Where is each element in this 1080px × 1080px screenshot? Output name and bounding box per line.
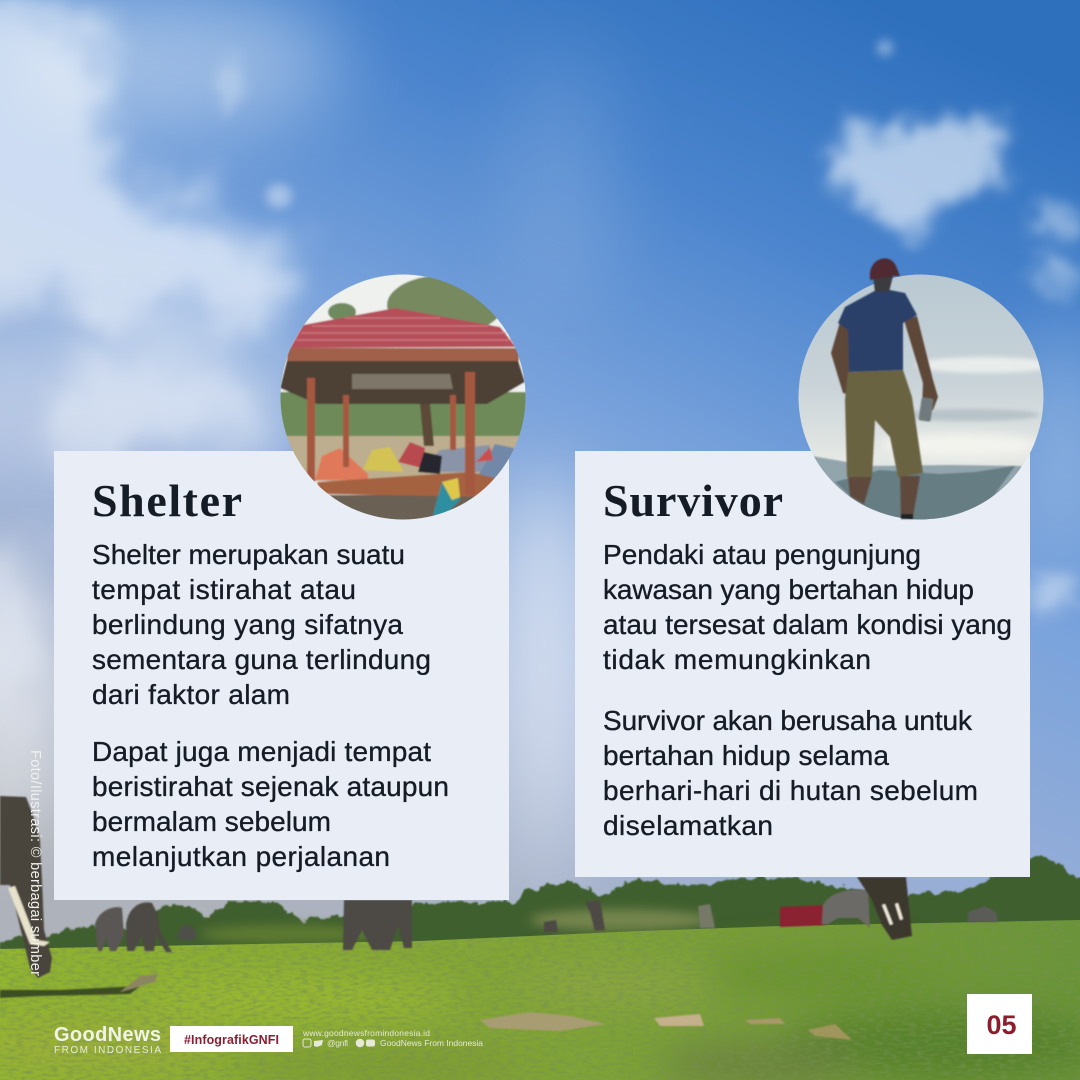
arms	[831, 322, 850, 395]
text block: shelter usage	[92, 736, 449, 872]
heading: survivor: Survivor	[603, 475, 783, 526]
text block: survivor behaviour: diselamatkan	[603, 810, 773, 841]
panel: shelter	[54, 451, 509, 900]
text block: shelter definition: sementara guna terlindung	[92, 644, 431, 675]
hashtag badge: #InfografikGNFI	[184, 1033, 279, 1047]
panel background	[54, 451, 509, 900]
text block: shelter usage: beristirahat sejenak ataupun	[92, 771, 449, 802]
elephant group left	[95, 902, 196, 952]
photo: survivor	[798, 258, 1055, 530]
text block: shelter definition: tempat istirahat atau	[92, 574, 356, 605]
page number	[967, 994, 1032, 1054]
roof	[290, 308, 516, 348]
posts	[307, 378, 315, 482]
panel background	[575, 451, 1030, 877]
page number: 05	[986, 1010, 1017, 1040]
footer contact links: GoodNews From Indonesia	[380, 1038, 483, 1048]
legs	[848, 476, 872, 504]
text block: shelter definition: dari faktor alam	[92, 679, 290, 710]
elephant: large at left edge	[0, 796, 52, 978]
elephants in the field	[0, 796, 998, 978]
footer contact links: @gnfi	[327, 1038, 348, 1048]
footer contact links: www.goodnewsfromindonesia.id	[302, 1028, 430, 1038]
text block: shelter definition: Shelter merupakan suatu	[92, 539, 405, 570]
elephant under left panel	[343, 900, 412, 950]
text block: survivor definition: tidak memungkinkan	[603, 644, 871, 675]
text block: shelter definition: berlindung yang sifatnya	[92, 609, 403, 640]
text block: survivor behaviour: Survivor akan berusaha untuk	[603, 705, 973, 736]
panel: survivor	[575, 451, 1030, 877]
text block: survivor definition	[603, 539, 1012, 675]
tents	[315, 448, 368, 480]
roof underside	[280, 360, 525, 404]
shirt	[838, 288, 917, 372]
footer logo: GoodNews From Indonesia	[54, 1024, 161, 1056]
text block: shelter definition	[92, 539, 431, 710]
roof beam	[287, 348, 519, 361]
ground and floor	[328, 494, 476, 520]
main left cloud	[0, 0, 295, 730]
footer contact links	[302, 1028, 483, 1048]
footer logo: GoodNews From Indonesia: GoodNews	[54, 1024, 161, 1046]
mountains	[814, 456, 1022, 520]
text block: survivor behaviour: bertahan hidup selama	[603, 740, 889, 771]
text block: shelter usage: melanjutkan perjalanan	[92, 841, 390, 872]
background: grass field	[0, 920, 1080, 1080]
right cloud	[216, 58, 1080, 609]
elephants and truck at right	[780, 877, 912, 940]
person	[831, 258, 938, 519]
photo: shelter hut	[280, 274, 526, 520]
text block: survivor definition: Pendaki atau pengunjung	[603, 539, 921, 570]
background: tree line	[0, 856, 1080, 960]
heading: shelter: Shelter	[92, 475, 242, 526]
sky in circle	[798, 274, 1055, 530]
text block: survivor behaviour: berhari-hari di hutan sebelum	[603, 775, 978, 806]
text block: survivor definition: atau tersesat dalam kondisi yang	[603, 609, 1012, 640]
text block: shelter usage: bermalam sebelum	[92, 806, 331, 837]
text block: survivor behaviour	[603, 705, 978, 841]
text block: survivor definition: kawasan yang bertahan hidup	[603, 574, 974, 605]
text block: shelter usage: Dapat juga menjadi tempat	[92, 736, 431, 767]
hashtag badge	[170, 1026, 293, 1052]
shorts	[845, 370, 923, 477]
distant elephants	[544, 900, 998, 932]
footer logo: GoodNews From Indonesia: FROM INDONESIA	[54, 1045, 161, 1056]
head and cap	[873, 276, 893, 292]
photo credit: Foto/Ilustrasi: © berbagai sumber	[27, 750, 43, 976]
